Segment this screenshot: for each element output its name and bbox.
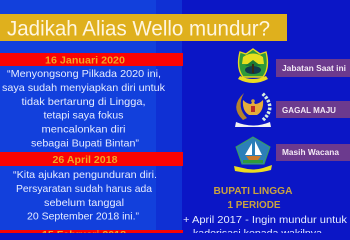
label: GAGAL MAJU: GAGAL MAJU (282, 105, 336, 115)
date heading: 16 Januari 2020: 16 Januari 2020 (45, 56, 125, 66)
icon: Riau Islands emblem (234, 137, 272, 173)
quote: pengunduran diri (13, 169, 157, 222)
date heading: 16 Januari 2020 (0, 53, 183, 66)
text: April 2017 note (183, 214, 348, 240)
icon: Lingga regency emblem (238, 49, 268, 83)
heading: Bupati Lingga 1 Periode (214, 186, 292, 211)
panel: quotes (0, 0, 183, 240)
quote: Pilkada 2020: saya sudah menyiapkan diri untuk (2, 82, 166, 94)
date heading: 26 April 2018: 26 April 2018 (52, 155, 118, 166)
quote: pengunduran diri: Persyaratan sudah harus ada (16, 183, 152, 195)
quote: pengunduran diri: 20 September 2018 ini.” (27, 210, 139, 222)
icon: DPD eagle emblem (235, 93, 271, 127)
label: Jabatan Saat ini: Jabatan Saat ini (282, 64, 346, 73)
label: Masih Wacana: Masih Wacana (282, 147, 339, 157)
quote: pengunduran diri: sebelum tanggal (44, 197, 124, 209)
quote: Pilkada 2020 (2, 68, 166, 150)
date heading: clipped third date (0, 230, 183, 240)
heading: Bupati Lingga 1 Periode: BUPATI LINGGA (214, 186, 292, 197)
quote: Pilkada 2020: sebagai Bupati Bintan” (31, 138, 140, 150)
heading: Bupati Lingga 1 Periode: 1 PERIODE (228, 200, 281, 211)
date heading: 26 April 2018 (0, 152, 183, 166)
quote: Pilkada 2020: mencalonkan diri (42, 124, 126, 136)
label: GAGAL MAJU (276, 101, 350, 118)
title bar: Jadikah Alias Wello mundur? (7, 18, 270, 40)
quote: Pilkada 2020: tetapi saya fokus (44, 110, 124, 122)
quote: Pilkada 2020: “Menyongsong Pilkada 2020 ini, (7, 68, 161, 80)
label: Jabatan Saat ini (276, 59, 350, 77)
quote: Pilkada 2020: tidak bertarung di Lingga, (22, 96, 146, 108)
text: April 2017 note: + April 2017 - Ingin mundur untuk (183, 214, 348, 226)
label: Masih Wacana (276, 144, 350, 161)
quote: pengunduran diri: “Kita ajukan pengunduran diri. (13, 169, 157, 181)
